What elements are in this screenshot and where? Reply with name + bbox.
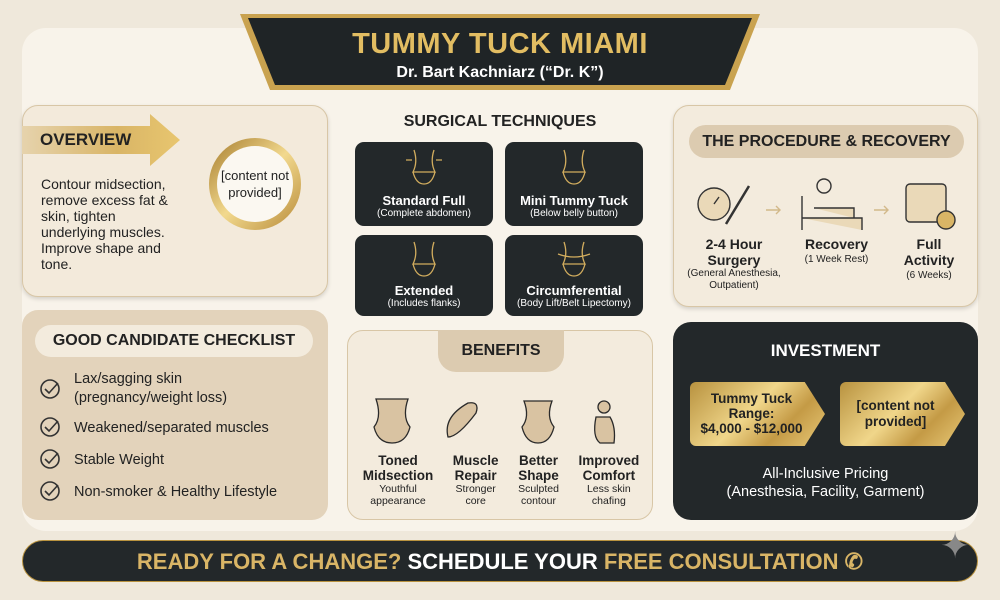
cta bar: READY FOR A CHANGE? SCHEDULE YOUR FREE CONSULTATION ✆ (137, 549, 863, 574)
benefit labels: Less skin (587, 483, 631, 495)
benefit labels: Repair (455, 468, 497, 483)
procedure steps (687, 236, 954, 291)
procedure steps: Recovery (805, 236, 868, 252)
benefits heading: BENEFITS (461, 342, 541, 359)
card: standard full (355, 142, 493, 226)
checklist items: Non-smoker & Healthy Lifestyle (74, 484, 277, 500)
price tag: range: $4,000 - $12,000 (700, 421, 803, 436)
procedure steps: 2-4 Hour (706, 236, 762, 252)
procedure icons (697, 178, 956, 230)
checklist items (40, 371, 277, 501)
overview heading (22, 114, 180, 166)
benefit labels: Sculpted (518, 483, 559, 495)
price tag: range (690, 382, 825, 446)
checklist items: Weakened/separated muscles (74, 420, 269, 436)
price tag: placeholder: provided] (865, 414, 926, 429)
subtitle: Dr. Bart Kachniarz (“Dr. K”) (396, 64, 604, 81)
investment note (727, 466, 924, 500)
panel: benefits (347, 330, 653, 520)
benefit labels: Stronger (456, 483, 496, 495)
gold ring placeholder: [content not provided] (221, 168, 289, 200)
card: standard full: (Complete abdomen) (377, 208, 471, 219)
gold ring placeholder (209, 138, 301, 230)
title banner (240, 14, 760, 90)
title: TUMMY TUCK MIAMI (352, 28, 648, 60)
benefit labels: Muscle (453, 453, 499, 468)
procedure heading (689, 125, 964, 158)
benefit labels: Shape (518, 468, 559, 483)
panel: procedure & recovery (673, 105, 978, 307)
benefit labels: Youthful (379, 483, 417, 495)
card: extended: (Includes flanks) (388, 298, 460, 309)
benefit labels: contour (521, 495, 556, 507)
card: mini: Mini Tummy Tuck (520, 193, 628, 208)
cta bar (22, 540, 978, 582)
card: extended (355, 235, 493, 316)
benefit labels (363, 453, 639, 507)
benefit labels: core (465, 495, 486, 507)
benefits heading (438, 330, 564, 372)
benefit labels: Midsection (363, 468, 433, 483)
investment heading: INVESTMENT (771, 341, 880, 360)
card: circumferential: Circumferential (526, 283, 622, 298)
procedure heading: THE PROCEDURE & RECOVERY (702, 133, 951, 150)
overview heading: OVERVIEW (40, 130, 131, 149)
card: mini (505, 142, 643, 226)
procedure steps: Surgery (708, 252, 760, 268)
benefit icons (373, 398, 616, 444)
checklist items: Stable Weight (74, 452, 164, 468)
procedure steps: Outpatient) (709, 280, 759, 291)
benefit labels: Comfort (583, 468, 635, 483)
checklist heading: GOOD CANDIDATE CHECKLIST (53, 332, 295, 349)
procedure steps: (6 Weeks) (906, 270, 952, 281)
cards: techniques (355, 142, 643, 316)
checklist heading (35, 325, 313, 357)
heading: surgical techniques: SURGICAL TECHNIQUES (404, 113, 596, 130)
card: circumferential (505, 235, 643, 316)
panel: overview (22, 105, 328, 297)
panel: good candidate checklist (22, 310, 328, 520)
benefit labels: chafing (592, 495, 626, 507)
benefit labels: Improved (578, 453, 639, 468)
price tag: range: Range: (729, 406, 774, 421)
investment note: All-Inclusive Pricing (763, 466, 888, 482)
benefit labels: Better (519, 453, 558, 468)
card: circumferential: (Body Lift/Belt Lipectomy) (517, 298, 631, 309)
price tag: range: Tummy Tuck (711, 391, 792, 406)
card: mini: (Below belly button) (530, 208, 618, 219)
panel: investment (673, 322, 978, 520)
investment note: (Anesthesia, Facility, Garment) (727, 484, 924, 500)
checklist items: (pregnancy/weight loss) (74, 390, 227, 406)
benefit labels: Toned (378, 453, 418, 468)
price tag: placeholder (840, 382, 965, 446)
procedure steps: (1 Week Rest) (805, 254, 868, 265)
card: standard full: Standard Full (382, 193, 466, 208)
price tag: placeholder: [content not (856, 398, 934, 413)
procedure steps: Full (917, 236, 941, 252)
card: extended: Extended (395, 283, 453, 298)
procedure steps: Activity (904, 252, 954, 268)
checklist items: Lax/sagging skin (74, 371, 182, 387)
overview text: Contour midsection, remove excess fat & skin, tighten underlying muscles. Improve shape and tone. (41, 176, 168, 272)
icon: sparkle: ✦ (940, 525, 970, 566)
benefit labels: appearance (370, 495, 426, 507)
procedure steps: (General Anesthesia, (687, 268, 781, 279)
